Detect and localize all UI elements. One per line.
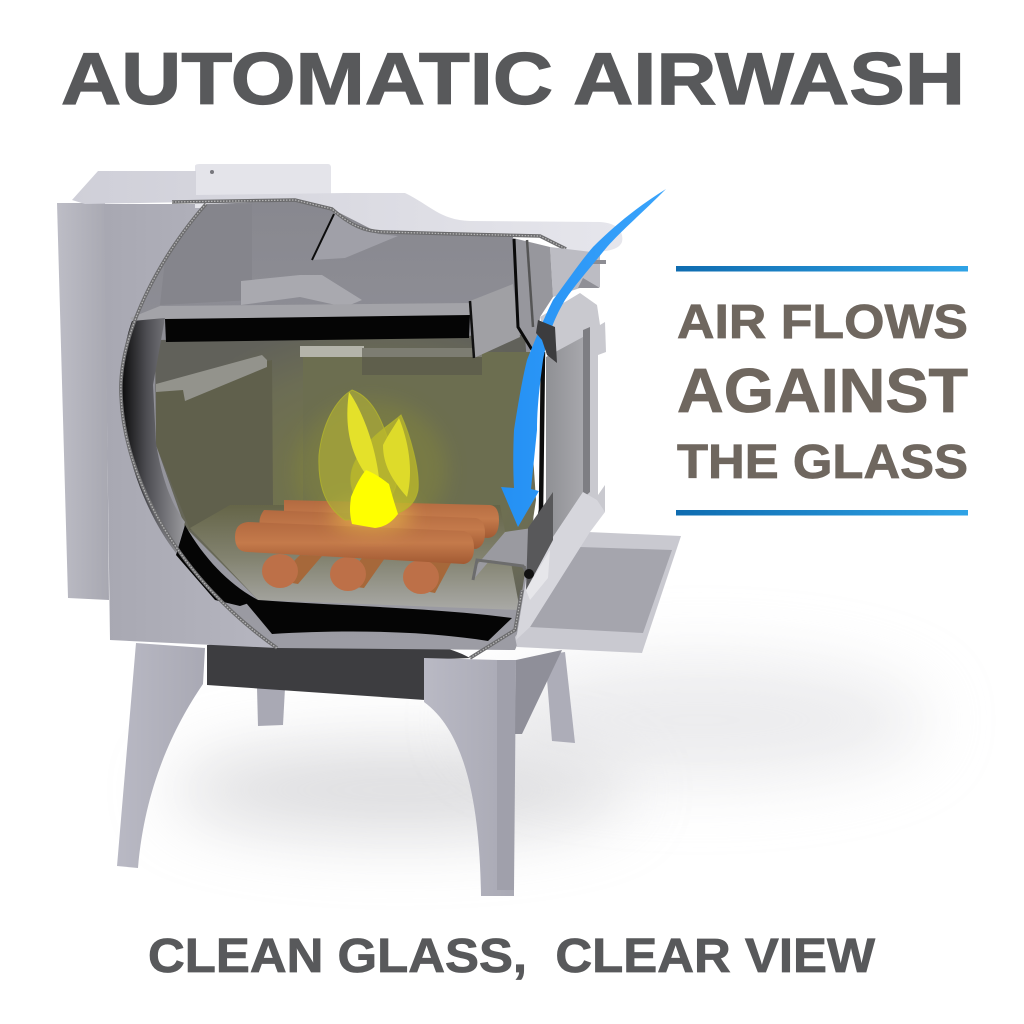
callout text	[677, 296, 968, 489]
callout text: AGAINST	[677, 357, 968, 426]
flue collar	[195, 164, 331, 208]
baffle clips	[241, 275, 362, 307]
middle log	[260, 510, 485, 549]
back wall glow	[297, 400, 447, 540]
outer body panel	[104, 204, 277, 648]
glass door frame	[528, 293, 606, 600]
flame core	[350, 470, 398, 528]
door bottom frame	[516, 492, 605, 640]
firebox	[155, 335, 536, 605]
front right leg	[424, 650, 562, 896]
upper wall seam	[160, 204, 252, 305]
lower black curve	[176, 525, 258, 606]
flames	[319, 390, 418, 531]
logs	[235, 500, 499, 594]
title: AUTOMATIC AIRWASH	[61, 39, 965, 120]
back shelf	[300, 346, 482, 375]
cross-section edges	[121, 200, 566, 658]
callout text: AIR FLOWS	[677, 296, 968, 349]
left curved firebrick	[121, 318, 185, 553]
ash lip	[473, 492, 553, 600]
airflow arrow	[501, 189, 666, 527]
stove illustration	[57, 164, 681, 896]
callout text: THE GLASS	[677, 436, 968, 489]
door details	[578, 260, 606, 498]
small log ends	[262, 554, 452, 594]
air channel	[513, 238, 553, 353]
ash shelf	[515, 532, 681, 653]
side wall	[156, 360, 273, 530]
back wall	[303, 352, 530, 510]
back log	[284, 500, 499, 538]
door glass	[546, 337, 583, 537]
back side panel	[57, 203, 109, 600]
bottom rule	[676, 510, 968, 516]
door seal profile	[536, 320, 557, 363]
firebox floor	[190, 505, 520, 610]
front left leg	[117, 643, 205, 868]
upper door block	[550, 247, 600, 297]
bracket in upper chamber	[312, 213, 398, 260]
side ledge	[156, 355, 267, 401]
ash pan	[207, 634, 470, 700]
baffle top	[130, 303, 472, 322]
rear legs	[257, 652, 575, 743]
interior cavity	[121, 201, 535, 650]
top plate	[72, 171, 622, 252]
door inner gasket	[538, 352, 543, 525]
tagline: CLEAN GLASS, CLEAR VIEW	[148, 930, 876, 983]
right baffle plate	[470, 284, 520, 358]
inner flame tongues	[347, 392, 380, 490]
black baffle band	[165, 315, 470, 342]
floor shadow	[170, 660, 930, 835]
outer flame	[319, 390, 397, 520]
second flame	[351, 415, 418, 516]
black bottom crescent	[242, 598, 512, 641]
front log	[235, 522, 474, 564]
top rule	[676, 266, 968, 272]
